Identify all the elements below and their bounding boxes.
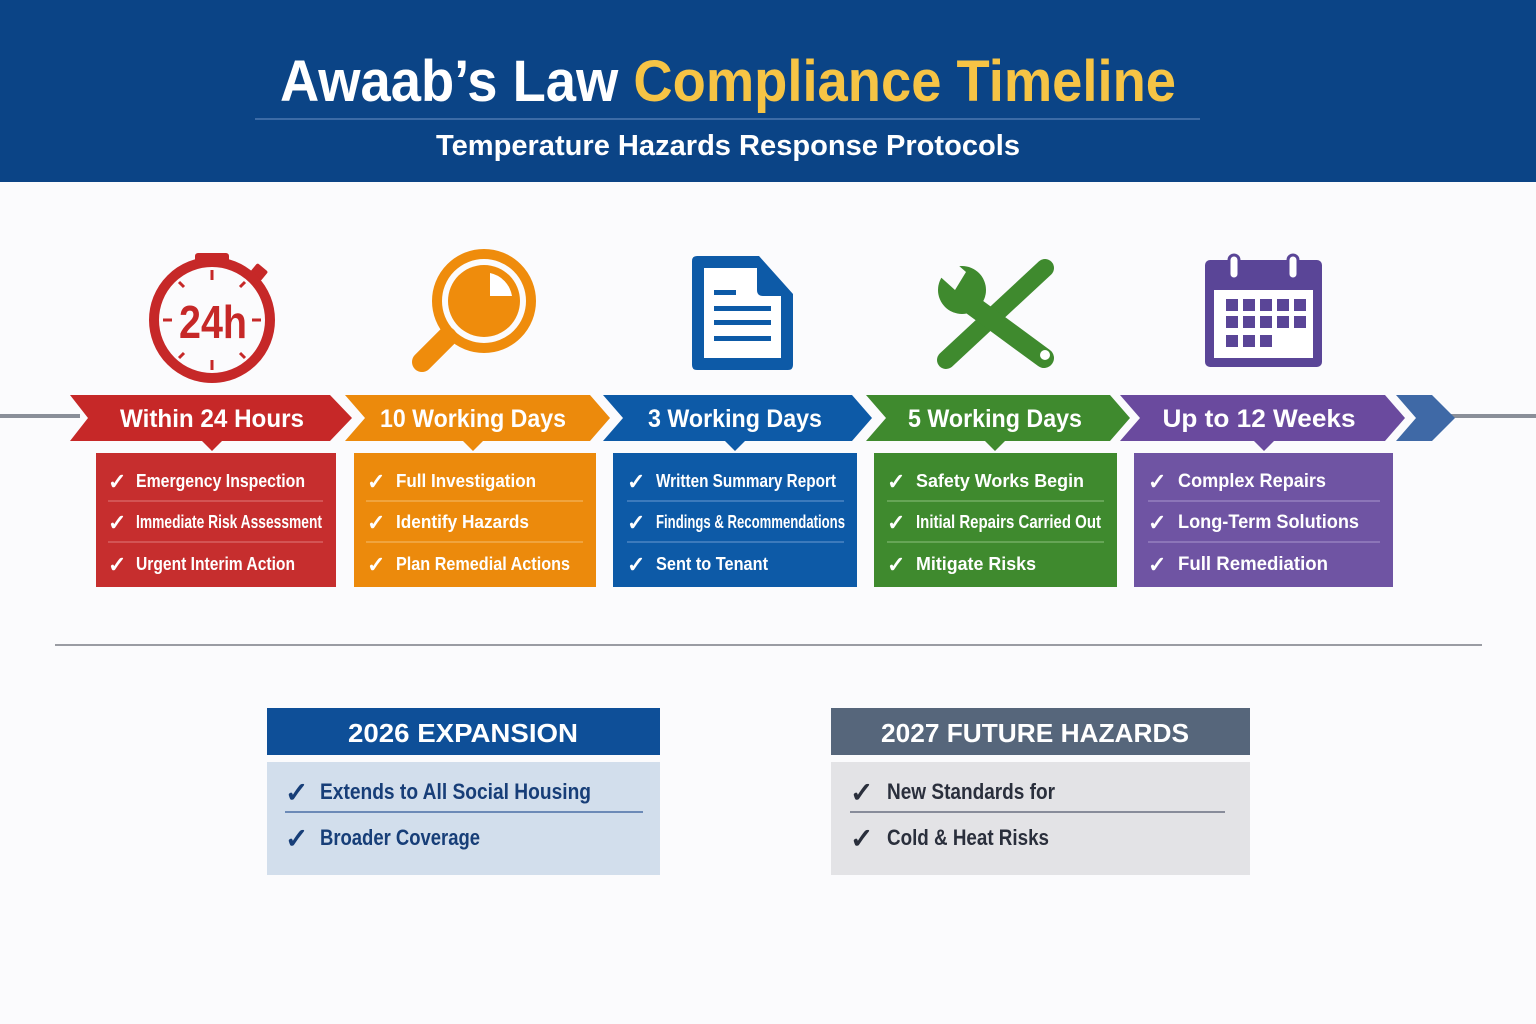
icon: 24h stopwatch (154, 253, 270, 378)
panel: 2027 future hazards: Cold & Heat Risks (887, 825, 1049, 850)
icon: calendar (1205, 255, 1322, 367)
panel: 3 days tasks: ✓ (627, 469, 645, 494)
header banner (0, 0, 1536, 182)
panel: 10 days tasks: Identify Hazards (396, 512, 529, 532)
panel: 24 hours tasks (96, 453, 336, 587)
arrow: 5 Working Days: 5 Working Days (908, 405, 1082, 433)
panel: 10 days tasks: ✓ (367, 510, 385, 535)
panel: 2026 expansion: 2026 EXPANSION (348, 718, 578, 748)
panel: 10 days tasks: ✓ (367, 469, 385, 494)
panel: 24 hours tasks: ✓ (108, 469, 126, 494)
panel: 2026 expansion: Extends to All Social Housing (320, 779, 591, 804)
panel: 3 days tasks: Sent to Tenant (656, 554, 768, 574)
arrow: Up to 12 Weeks: Up to 12 Weeks (1162, 405, 1356, 433)
panel: 12 weeks tasks: ✓ (1148, 552, 1166, 577)
panel: 5 days tasks: ✓ (887, 510, 905, 535)
arrow: end chevron (1396, 395, 1455, 441)
panel: 2027 future hazards: ✓ (850, 823, 873, 854)
panel: 2027 future hazards: New Standards for (887, 779, 1055, 804)
icon: magnifier (422, 254, 531, 362)
panel: 2027 future hazards (831, 708, 1250, 875)
panel: 2027 future hazards: 2027 FUTURE HAZARDS (881, 718, 1189, 748)
panel: 5 days tasks: ✓ (887, 469, 905, 494)
icon: document (692, 256, 793, 370)
arrow: Within 24 Hours (70, 395, 352, 451)
panel: 24 hours tasks: ✓ (108, 552, 126, 577)
arrow: 10 Working Days: 10 Working Days (380, 405, 566, 433)
panel: 2026 expansion: ✓ (285, 823, 308, 854)
panel: 12 weeks tasks: Full Remediation (1178, 554, 1328, 575)
arrow: 5 Working Days (866, 395, 1130, 451)
panel: 3 days tasks: ✓ (627, 552, 645, 577)
panel: 2027 future hazards: ✓ (850, 777, 873, 808)
arrow: Up to 12 Weeks (1120, 395, 1405, 451)
panel: 24 hours tasks: Immediate Risk Assessment (136, 512, 322, 532)
subtitle: Temperature Hazards Response Protocols (436, 130, 1020, 162)
panel: 3 days tasks: Written Summary Report (656, 471, 836, 491)
panel: 3 days tasks: Findings & Recommendations (656, 512, 845, 532)
panel: 5 days tasks (874, 453, 1117, 587)
panel: 10 days tasks: ✓ (367, 552, 385, 577)
panel: 5 days tasks: Mitigate Risks (916, 554, 1036, 574)
icon: tools (935, 258, 1050, 360)
panel: 10 days tasks: Plan Remedial Actions (396, 554, 570, 574)
panel: 3 days tasks (613, 453, 857, 587)
panel: 24 hours tasks: Emergency Inspection (136, 471, 305, 491)
panel: 5 days tasks: ✓ (887, 552, 905, 577)
arrow: Within 24 Hours: Within 24 Hours (120, 405, 304, 433)
panel: 12 weeks tasks: ✓ (1148, 469, 1166, 494)
panel: 12 weeks tasks: Long-Term Solutions (1178, 512, 1359, 533)
panel: 2026 expansion (267, 708, 660, 875)
panel: 10 days tasks: Full Investigation (396, 471, 536, 491)
panel: 24 hours tasks: Urgent Interim Action (136, 554, 295, 574)
panel: 12 weeks tasks: Complex Repairs (1178, 471, 1326, 492)
panel: 3 days tasks: ✓ (627, 510, 645, 535)
panel: 2026 expansion: Broader Coverage (320, 825, 480, 850)
panel: 12 weeks tasks (1134, 453, 1393, 587)
panel: 2026 expansion: ✓ (285, 777, 308, 808)
arrow: 3 Working Days: 3 Working Days (648, 405, 822, 433)
panel: 5 days tasks: Safety Works Begin (916, 471, 1084, 491)
panel: 24 hours tasks: ✓ (108, 510, 126, 535)
title: Awaab’s Law Compliance Timeline (280, 49, 1176, 114)
panel: 12 weeks tasks: ✓ (1148, 510, 1166, 535)
panel: 5 days tasks: Initial Repairs Carried Out (916, 512, 1101, 532)
panel: 10 days tasks (354, 453, 596, 587)
icon: 24h stopwatch: 24h (179, 296, 247, 348)
arrow: 10 Working Days (345, 395, 610, 451)
arrow: 3 Working Days (603, 395, 872, 451)
